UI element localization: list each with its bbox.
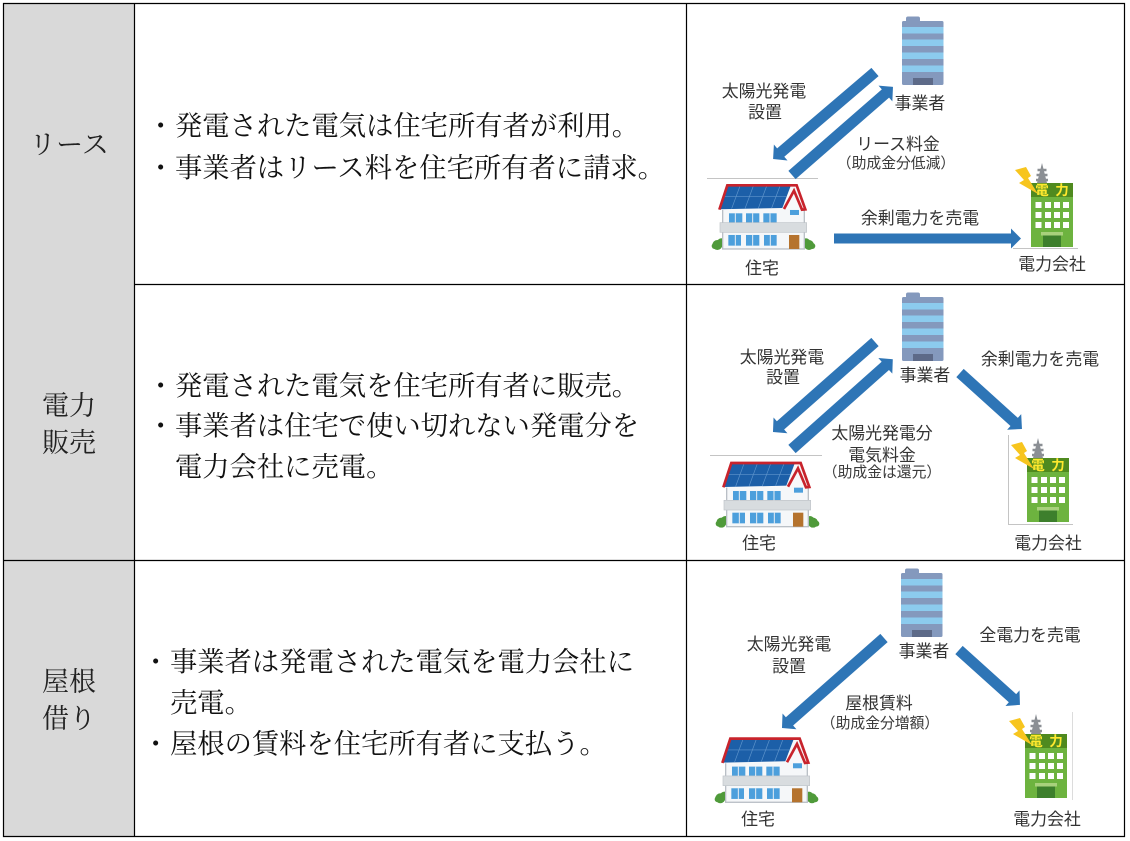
labels: 太陽光発電分 [831, 424, 933, 443]
text block: roof rental description: 売電。 [170, 688, 252, 718]
text block: roof rental description [142, 647, 634, 759]
text block: power sale description: 電力会社に売電。 [175, 452, 393, 482]
text block: lease description: ・ [147, 111, 174, 141]
labels: 余剰電力を売電 [861, 209, 979, 228]
panel: power sale diagram [710, 292, 1099, 553]
icon: house with solar panels [712, 185, 815, 250]
text block: power sale description: ・ [147, 371, 174, 401]
row label: 屋根借り: 借り [42, 704, 96, 734]
labels: 太陽光発電 [722, 82, 806, 101]
labels: 太陽光発電 [747, 635, 831, 654]
panel: lease diagram [707, 16, 1086, 278]
text block: roof rental description: 屋根の賃料を住宅所有者に支払う。 [170, 729, 607, 759]
labels: （助成金分低減） [837, 155, 955, 172]
row label: 電力販売: 電力 [42, 391, 96, 421]
labels: 事業者 [895, 94, 945, 113]
text block: power sale description: 発電された電気を住宅所有者に販売。 [175, 371, 639, 401]
labels: 設置 [772, 657, 806, 676]
labels [740, 348, 1099, 553]
arrow: house to power company [834, 228, 1021, 248]
labels: 太陽光発電 [740, 348, 824, 367]
text block: power sale description: 事業者は住宅で使い切れない発電分を [175, 411, 639, 441]
arrow: operator to power company [953, 365, 1029, 437]
row label: 電力販売 [42, 391, 96, 458]
icon: power company: 電 [1035, 183, 1049, 198]
labels [741, 626, 1081, 829]
arrow: operator to house [766, 334, 882, 440]
icon: power company: 力 [1051, 458, 1065, 473]
icon: power company: 電 [1031, 458, 1045, 473]
icon: power company [1015, 163, 1073, 247]
icon: operator building [902, 16, 944, 85]
arrow: house to operator [785, 79, 900, 183]
labels [722, 82, 1086, 278]
text block: roof rental description: ・ [142, 647, 169, 677]
labels: 電力会社 [1018, 255, 1086, 274]
text block: lease description: 発電された電気は住宅所有者が利用。 [175, 111, 639, 141]
icon: power company [1009, 714, 1067, 798]
row label: 屋根借り: 屋根 [42, 667, 96, 697]
icon: power company [1011, 438, 1069, 522]
icon: operator building [902, 292, 944, 361]
text block: lease description [147, 111, 665, 183]
labels: 設置 [766, 368, 800, 387]
labels: 全電力を売電 [979, 626, 1081, 645]
labels: 屋根賃料 [845, 694, 913, 713]
text block: lease description: ・ [147, 153, 174, 183]
labels: 住宅 [742, 534, 776, 553]
icon: power company: 力 [1055, 183, 1069, 198]
labels: 事業者 [900, 366, 950, 385]
arrow: operator to power company [952, 642, 1027, 713]
icon: power company: 電 [1029, 734, 1043, 749]
icon: operator building [901, 568, 942, 637]
arrow: operator to house [775, 630, 891, 736]
labels: （助成金分増額） [821, 715, 939, 732]
labels: 電力会社 [1013, 810, 1081, 829]
icon: house with solar panels [716, 463, 819, 528]
text block: lease description: 事業者はリース料を住宅所有者に請求。 [175, 153, 665, 183]
labels: 電気料金 [848, 446, 916, 465]
panel: roof rental diagram [715, 568, 1081, 829]
labels: 電力会社 [1014, 534, 1082, 553]
labels: 事業者 [899, 642, 949, 661]
labels: 設置 [748, 103, 782, 122]
labels: 住宅 [741, 810, 775, 829]
labels: リース料金 [856, 135, 940, 154]
text block: roof rental description: ・ [142, 729, 169, 759]
row label: 屋根借り [42, 667, 96, 734]
row label: リース: リース [29, 130, 109, 160]
labels: 住宅 [745, 259, 779, 278]
table background column [4, 3, 134, 836]
arrow: operator to house [766, 64, 882, 167]
icon: house with solar panels [715, 738, 818, 803]
labels: 余剰電力を売電 [981, 350, 1099, 369]
labels: （助成金は還元） [823, 464, 941, 481]
row label: 電力販売: 販売 [42, 428, 96, 458]
arrow: house to operator [785, 351, 900, 457]
text block: power sale description: ・ [147, 411, 174, 441]
text block: roof rental description: 事業者は発電された電気を電力会社に [170, 647, 634, 677]
text block: power sale description [147, 371, 639, 482]
icon: power company: 力 [1049, 734, 1063, 749]
